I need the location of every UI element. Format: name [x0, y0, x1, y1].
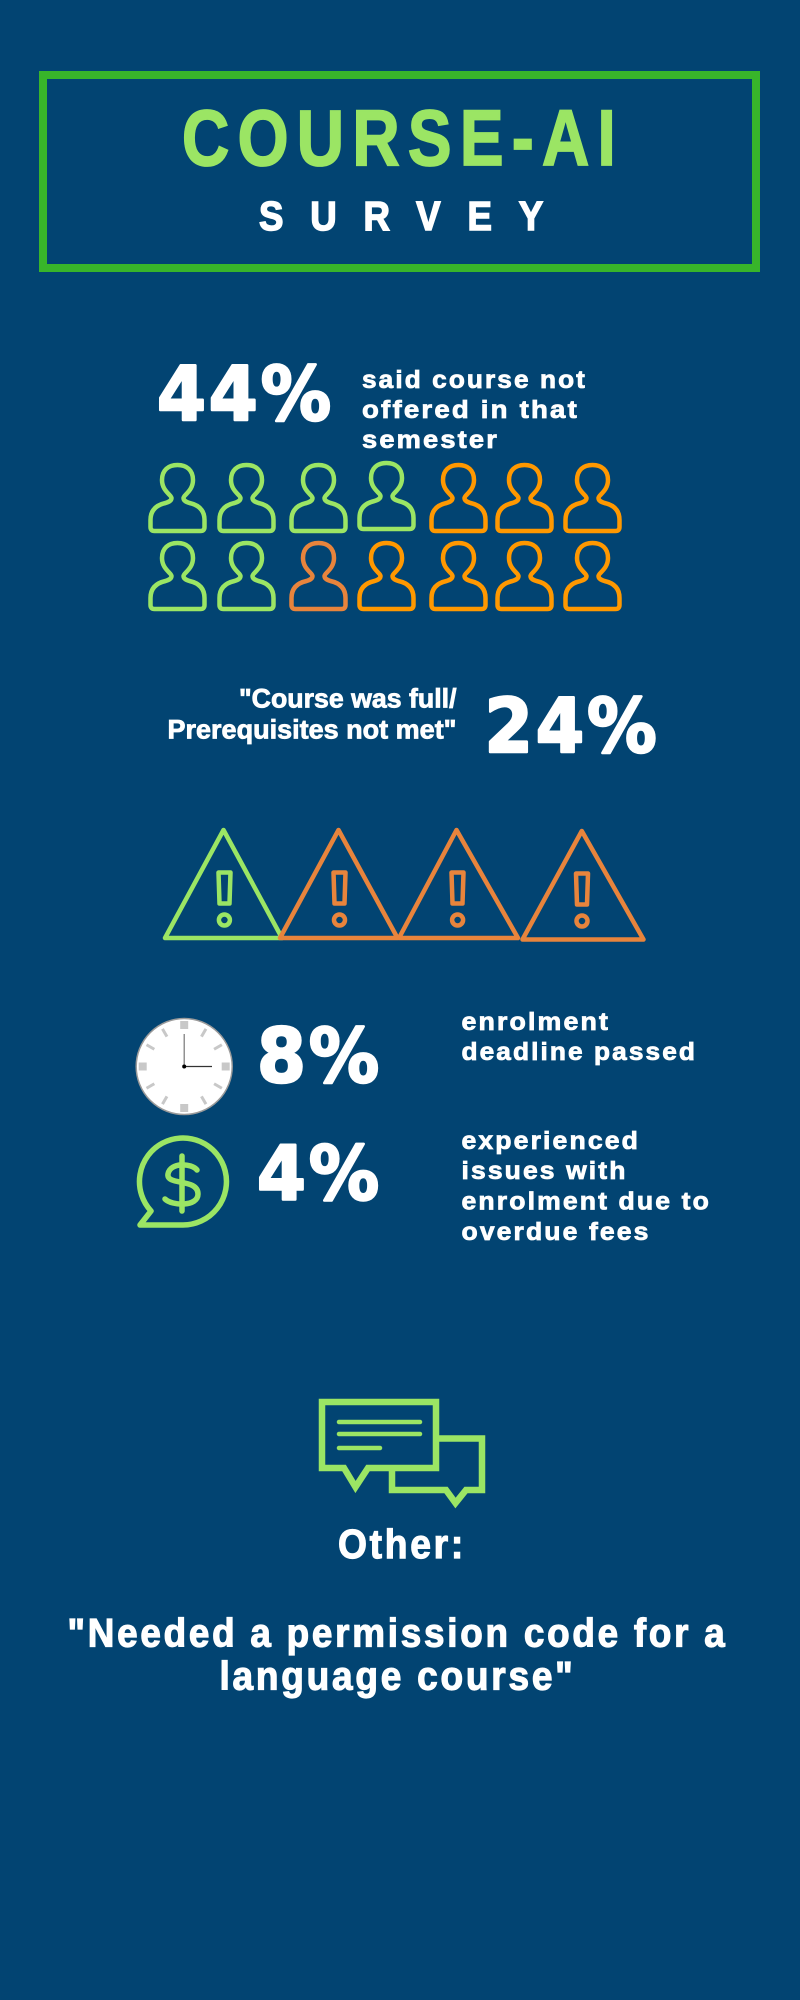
icon: orange warning triangle 2 — [280, 830, 398, 938]
text: said course not offered: said course not — [362, 366, 587, 394]
quote: permission code: "Needed a permission code for a — [68, 1612, 728, 1656]
stat: 24 percent — [168, 682, 660, 770]
text: Other: Other: — [338, 1521, 466, 1567]
text: enrolment deadline passed: deadline passed — [462, 1038, 697, 1066]
icon: dollar speech bubble — [139, 1138, 226, 1225]
quote: permission code: language course" — [220, 1654, 576, 1698]
quote: course was full: "Course was full/ — [239, 684, 457, 714]
icon: orange warning triangle 4 — [522, 831, 644, 940]
title frame — [43, 75, 756, 268]
icon: clock — [136, 1018, 232, 1114]
text: overdue fees: experienced — [462, 1127, 640, 1155]
number: 24%: 24% — [484, 682, 660, 770]
quote: course was full: Prerequisites not met" — [168, 714, 456, 744]
text: overdue fees: issues with — [462, 1157, 628, 1185]
title: COURSE-AI: COURSE-AI — [182, 93, 624, 182]
people pictogram: 14 figures — [150, 463, 620, 609]
number: 44%: 44% — [157, 350, 334, 438]
icon: green warning triangle — [165, 830, 282, 938]
number: 8%: 8% — [257, 1012, 382, 1100]
stat: 4 percent — [139, 1127, 711, 1246]
icon: orange warning triangle 3 — [399, 830, 518, 938]
text: said course not offered — [362, 366, 587, 454]
warning triangles — [165, 830, 644, 940]
number: 4%: 4% — [257, 1130, 382, 1218]
stat: 44 percent — [157, 350, 587, 454]
text: overdue fees: enrolment due to — [462, 1188, 711, 1216]
stat: 8 percent — [136, 1008, 697, 1114]
quote: permission code — [68, 1612, 728, 1698]
text: said course not offered: semester — [362, 426, 499, 454]
quote: course was full — [168, 684, 457, 744]
text: overdue fees: overdue fees — [462, 1218, 650, 1246]
text: enrolment deadline passed — [462, 1008, 697, 1066]
icon: chat bubbles — [322, 1402, 482, 1503]
title panel — [43, 75, 756, 268]
subtitle: SURVEY: SURVEY — [259, 193, 570, 239]
text: said course not offered: offered in that — [362, 396, 579, 424]
text: overdue fees — [462, 1127, 711, 1246]
text: enrolment deadline passed: enrolment — [462, 1008, 610, 1036]
